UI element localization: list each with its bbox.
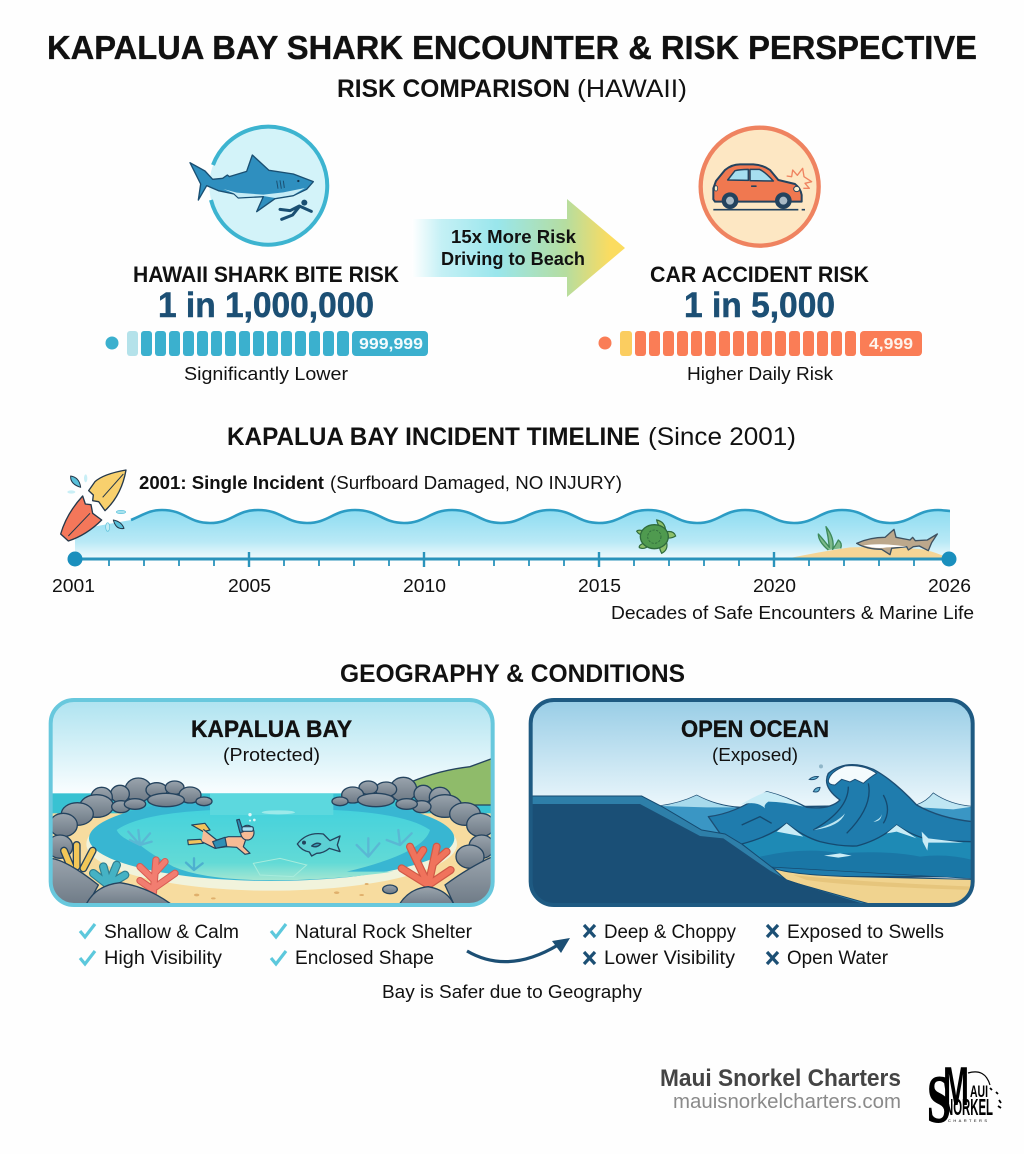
logo: Maui Snorkel Charters (927, 1055, 1001, 1137)
heading: incident timeline: KAPALUA BAY INCIDENT TIMELINE (227, 423, 640, 451)
panel: shark bite risk (106, 127, 428, 384)
icon: fish (297, 834, 340, 856)
list: open ocean traits: Open Water (787, 948, 889, 969)
year labels: 2020 (753, 575, 796, 596)
footer: brand name: Maui Snorkel Charters (660, 1065, 901, 1092)
year labels: 2026 (928, 575, 971, 596)
list: open ocean traits (584, 922, 944, 969)
unit bar: shark risk: 999,999 (359, 336, 423, 353)
icon: car crash (701, 128, 819, 246)
illustration: exposed ocean (531, 700, 973, 907)
logo: Maui Snorkel Charters: M (943, 1055, 969, 1117)
logo: Maui Snorkel Charters: AUI (970, 1082, 988, 1101)
unit bar: car risk (598, 331, 922, 356)
sand, seaweed, shark (787, 527, 948, 559)
footer: brand name (660, 1065, 901, 1113)
arrow: 15x more risk: Driving to Beach (441, 249, 585, 269)
rock walls (47, 777, 495, 868)
panel subtitle: protected: (Protected) (223, 744, 320, 765)
list: Kapalua Bay traits (80, 922, 473, 969)
water band (75, 510, 950, 559)
subtitle: risk comparison (337, 75, 687, 103)
illustration: protected bay (47, 700, 495, 907)
logo: Maui Snorkel Charters: S (927, 1061, 951, 1137)
arrow: 15x more risk: 15x More Risk (451, 227, 577, 247)
icon: shark and swimmer (190, 127, 327, 245)
logo: Maui Snorkel Charters: CHARTERS (948, 1118, 987, 1123)
heading: Hawaii shark bite risk: HAWAII SHARK BITE RISK (133, 262, 399, 287)
panel: open ocean (531, 700, 973, 907)
panel title: open ocean: OPEN OCEAN (681, 716, 829, 743)
corals (64, 845, 451, 893)
list: Kapalua Bay traits: Natural Rock Shelter (295, 922, 473, 943)
year labels: 2005 (228, 575, 271, 596)
heading: incident timeline: (Since 2001) (648, 423, 796, 451)
caption: significantly lower: Significantly Lower (184, 364, 348, 384)
panel: Kapalua Bay (47, 700, 495, 907)
icon: snorkeler (188, 813, 256, 854)
panel subtitle: exposed: (Exposed) (712, 744, 798, 765)
list: open ocean traits: Lower Visibility (604, 948, 736, 969)
timeline caption: Decades of Safe Encounters & Marine Life (611, 602, 974, 623)
arrow: bay to ocean (467, 938, 570, 962)
unit bar: shark risk (106, 331, 428, 356)
list: open ocean traits: Deep & Choppy (604, 922, 736, 943)
caption: bay is safer: Bay is Safer due to Geography (382, 982, 642, 1002)
subtitle: risk comparison: RISK COMPARISON (337, 75, 570, 103)
list: Kapalua Bay traits: Shallow & Calm (104, 922, 239, 943)
chart: incident timeline (52, 470, 974, 623)
footer: brand name: mauisnorkelcharters.com (673, 1091, 901, 1113)
heading: car accident risk: CAR ACCIDENT RISK (650, 262, 869, 287)
year labels: 2015 (578, 575, 621, 596)
list: Kapalua Bay traits: High Visibility (104, 948, 223, 969)
subtitle: risk comparison: (HAWAII) (577, 75, 687, 103)
year labels (52, 575, 971, 596)
year labels: 2010 (403, 575, 446, 596)
incident label: (Surfboard Damaged, NO INJURY) (330, 472, 622, 493)
arrow: 15x more risk (412, 199, 625, 297)
panel title: Kapalua Bay: KAPALUA BAY (191, 716, 352, 743)
panel: car accident risk (598, 128, 922, 384)
heading: geography and conditions: GEOGRAPHY & CONDITIONS (340, 660, 685, 688)
incident label: 2001: Single Incident (139, 472, 324, 493)
title: KAPALUA BAY SHARK ENCOUNTER & RISK PERSPECTIVE (47, 30, 977, 67)
axis (75, 552, 949, 567)
unit bar: car risk: 4,999 (869, 336, 913, 353)
number: 1 in 1,000,000: 1 in 1,000,000 (158, 286, 374, 325)
year labels: 2001 (52, 575, 95, 596)
number: 1 in 5,000: 1 in 5,000 (684, 286, 835, 325)
caption: higher daily risk: Higher Daily Risk (687, 364, 834, 384)
list: open ocean traits: Exposed to Swells (787, 922, 944, 943)
list: Kapalua Bay traits: Enclosed Shape (295, 948, 434, 969)
incident label (139, 472, 622, 493)
icon: sea turtle (637, 520, 676, 553)
icon: broken surfboard (61, 470, 126, 541)
